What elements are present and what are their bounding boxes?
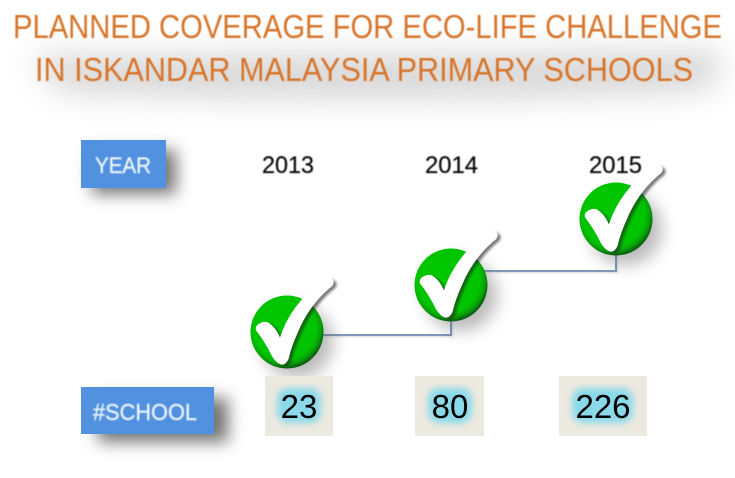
school count 2014: 80: [432, 388, 468, 425]
school count 2013: 23: [281, 388, 317, 425]
check icon 2015: [580, 165, 665, 265]
check icon 2013: [250, 278, 336, 378]
school count 2015: [559, 376, 647, 436]
year label: YEAR: [95, 153, 151, 178]
school label: #SCHOOL: [93, 399, 197, 425]
connector 2013 to 2014: [320, 318, 452, 336]
year 2013: 2013: [262, 152, 314, 179]
school count 2014: [415, 376, 484, 436]
year label: [81, 140, 176, 194]
year 2015: 2015: [589, 152, 642, 179]
title: [13, 8, 722, 101]
title text: [13, 8, 722, 88]
year 2014: 2014: [425, 152, 478, 179]
title shadow: [35, 50, 722, 101]
connector 2014 to 2015: [484, 252, 617, 272]
school label: [81, 387, 228, 442]
school count 2013: [265, 376, 333, 436]
school count 2015: 226: [575, 388, 631, 425]
check icon 2014: [414, 231, 500, 331]
title text: IN ISKANDAR MALAYSIA PRIMARY SCHOOLS: [35, 51, 693, 88]
